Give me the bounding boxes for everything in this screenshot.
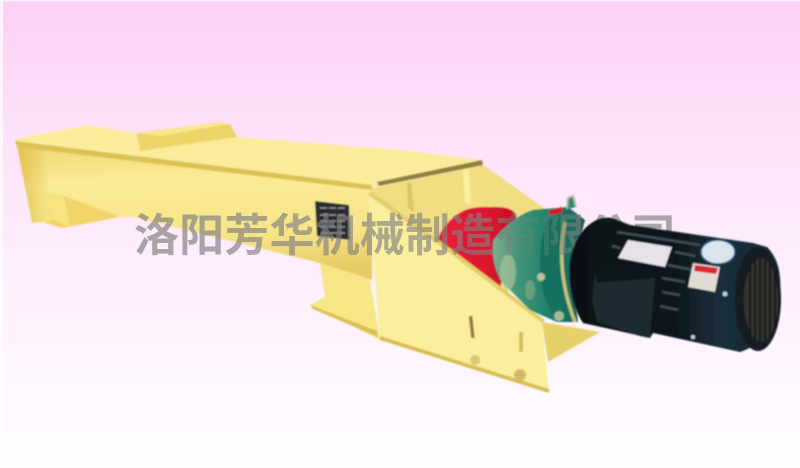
terminal box xyxy=(592,265,655,338)
plate flange xyxy=(542,322,600,362)
inner end housing xyxy=(368,165,560,300)
side plate xyxy=(368,195,549,393)
motor label xyxy=(618,240,672,267)
warning plate xyxy=(688,263,720,292)
lifting eye xyxy=(567,196,576,209)
green gearbox xyxy=(492,196,585,322)
trough front wall xyxy=(17,145,372,280)
trough top cover xyxy=(15,124,483,187)
screw conveyor body xyxy=(15,122,600,393)
brass ring xyxy=(562,222,575,322)
watermark: 洛阳芳华机械制造有限公司 xyxy=(134,210,676,261)
support leg xyxy=(310,263,380,340)
motor fan cover xyxy=(735,247,781,351)
nameplate xyxy=(315,201,350,240)
motor highlights xyxy=(722,292,728,296)
left support foot xyxy=(43,193,120,228)
electric motor xyxy=(570,218,781,352)
front edge of cover xyxy=(15,141,372,190)
inlet hopper xyxy=(137,122,237,151)
trough end shading xyxy=(17,145,52,223)
round badge xyxy=(701,240,735,264)
cooling fins xyxy=(612,232,700,310)
plate slots and bolts xyxy=(469,316,526,381)
red coupling guard xyxy=(437,207,518,288)
housing top slot xyxy=(377,160,483,186)
